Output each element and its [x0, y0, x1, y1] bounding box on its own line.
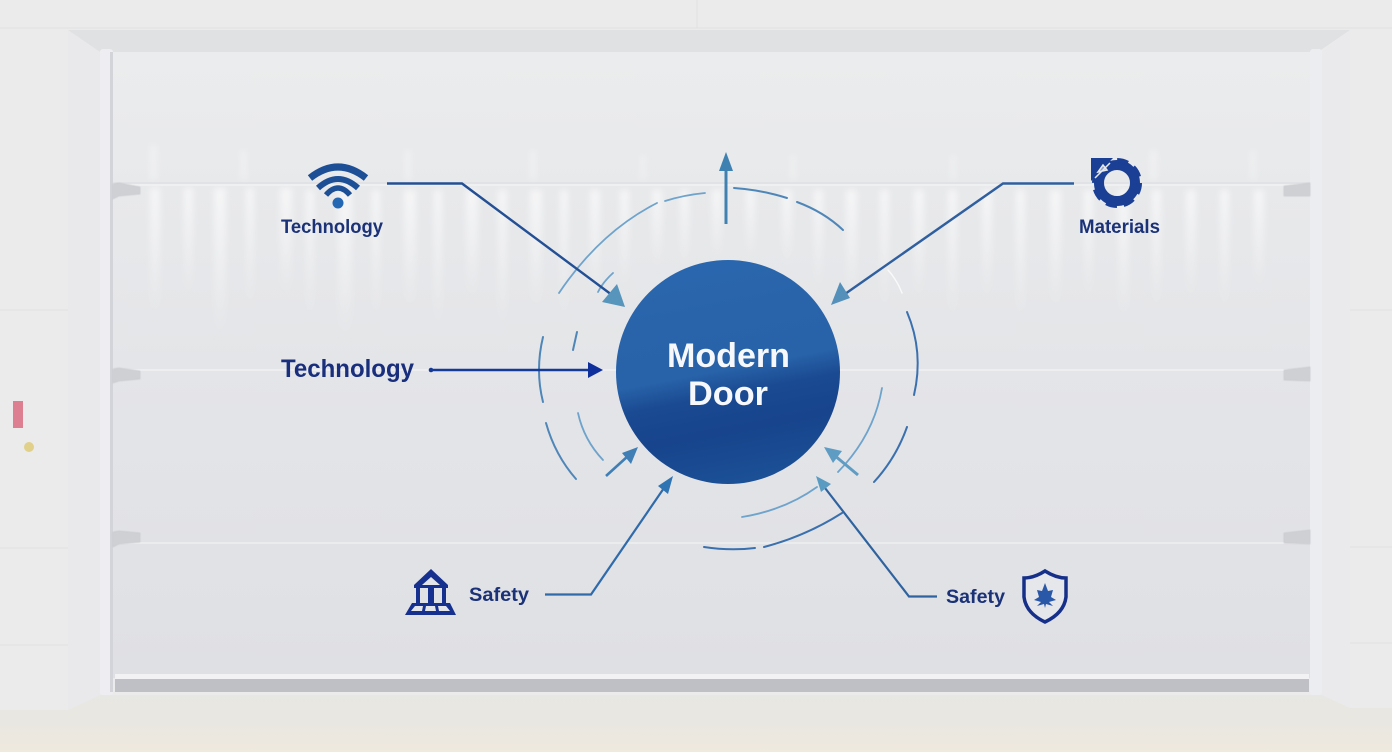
- label: Technology (middle): Technology: [281, 355, 414, 383]
- label: Technology (top): Technology: [281, 217, 383, 238]
- central hub: Modern Door: [616, 260, 840, 484]
- door hinges: [113, 183, 1310, 547]
- icon: shield: [1024, 571, 1066, 622]
- arrow: top outward: [719, 152, 733, 224]
- wall sign: red tag: [13, 401, 23, 428]
- icon: wifi: [310, 167, 366, 208]
- arrow: technology icon to hub: [387, 184, 625, 307]
- wall button: yellow: [24, 442, 34, 452]
- icon: house on base: [405, 569, 456, 615]
- label: Safety (right): Safety: [946, 587, 1005, 608]
- door bottom seal: [115, 674, 1309, 692]
- arrow: safety house to hub: [545, 476, 673, 594]
- icon: gear and triangle: [1091, 158, 1140, 206]
- label: Materials: Materials: [1079, 217, 1160, 238]
- door panels: [113, 52, 1310, 678]
- central hub: Modern Door: Door: [688, 375, 768, 413]
- arrow: short lower-left: [606, 447, 638, 476]
- arrow: safety shield to hub: [816, 476, 937, 596]
- arrow: technology label to hub: [429, 362, 603, 378]
- arrow: materials to hub: [831, 184, 1074, 305]
- dashed orbit arcs around the hub: [539, 188, 918, 549]
- central hub: Modern Door: Modern: [667, 337, 790, 375]
- arrow: short lower-right: [824, 447, 858, 475]
- floor: [0, 695, 1392, 752]
- label: Safety (left): Safety: [469, 585, 529, 606]
